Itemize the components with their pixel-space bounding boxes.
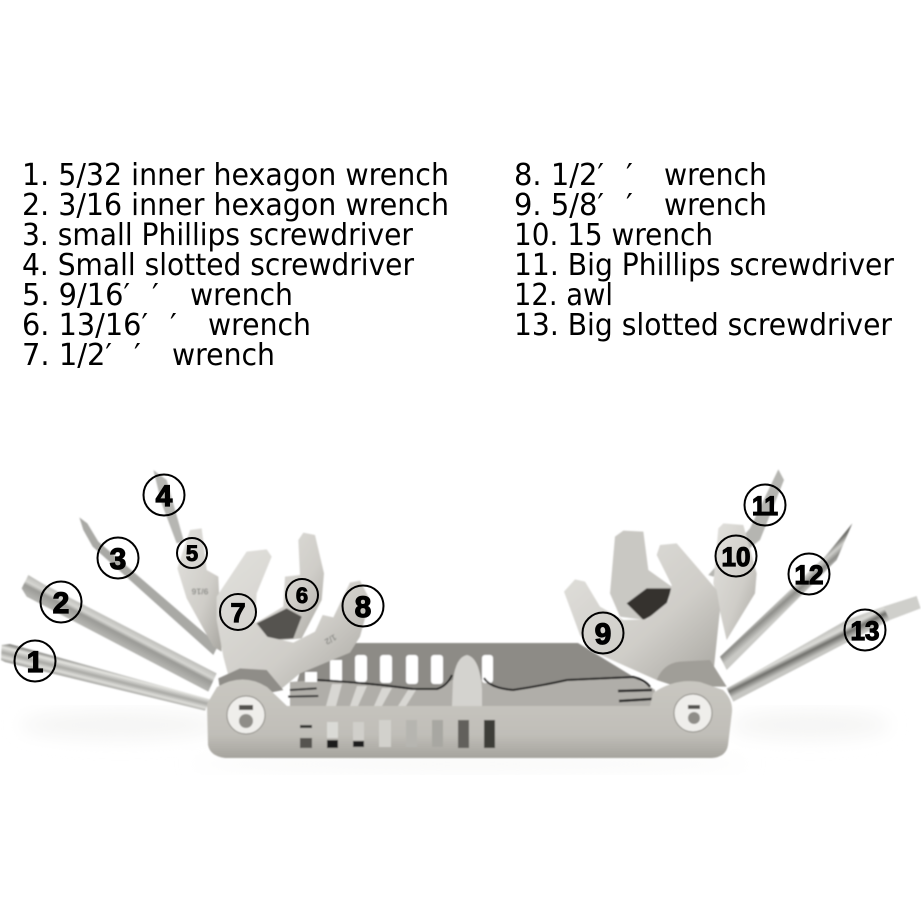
- front plate slots: [300, 720, 495, 748]
- wrench 9: [564, 543, 720, 680]
- callout 4: [144, 474, 184, 516]
- spring line: [317, 675, 650, 690]
- wrench 10: [713, 523, 757, 640]
- callout 9: [582, 612, 624, 654]
- left screw: [227, 696, 265, 734]
- floor shadow: [20, 711, 890, 769]
- callout 10: [716, 536, 756, 576]
- back plate: [290, 643, 655, 708]
- item 7: 7. 1/2′: [22, 338, 112, 373]
- wrench 6: [255, 533, 324, 642]
- callout 13: 13: [850, 616, 880, 646]
- callout 11: 11: [752, 491, 778, 521]
- item 5: ′: [152, 278, 159, 313]
- centre pin: [452, 655, 482, 706]
- item 9: ′: [626, 188, 633, 223]
- item 6: [22, 308, 311, 343]
- back plate lower strip: [290, 677, 655, 708]
- callout 13: [844, 610, 886, 650]
- item 6: ′: [170, 308, 177, 343]
- callout 3: [98, 538, 138, 578]
- reflected light stripes: [326, 684, 416, 706]
- callout 12: [788, 554, 830, 594]
- callout 9: 9: [595, 618, 611, 651]
- item 5: 5. 9/16′: [22, 278, 130, 313]
- item 6: wrench: [208, 308, 311, 343]
- item 7: ′: [134, 338, 141, 373]
- item 2: 2. 3/16 inner hexagon wrench: [22, 188, 449, 223]
- wrench 6 inner shadow: [257, 608, 302, 640]
- callout 10: 10: [722, 542, 750, 572]
- engraving on wrench 5: 9/16: [191, 587, 208, 597]
- back plate upper wall: [290, 643, 655, 708]
- wrench 7 and 8: [217, 549, 370, 690]
- item 1: 1. 5/32 inner hexagon wrench: [22, 158, 449, 193]
- text list: tools 1 to 7: [22, 158, 449, 373]
- item 10: 10. 15 wrench: [514, 218, 713, 253]
- item 9: wrench: [664, 188, 767, 223]
- back plate slots: [305, 655, 493, 684]
- item 4: 4. Small slotted screwdriver: [22, 248, 415, 283]
- left side tools: [1, 470, 370, 711]
- right side tools: [564, 469, 921, 702]
- pivot left: [218, 668, 283, 693]
- callout 7: 7: [230, 598, 246, 628]
- item 3: 3. small Phillips screwdriver: [22, 218, 414, 253]
- item 8: wrench: [664, 158, 767, 193]
- item 5: wrench: [190, 278, 293, 313]
- item 12: 12. awl: [514, 278, 613, 313]
- callout 2: [40, 582, 82, 622]
- callout 6: [286, 579, 318, 611]
- callout 5: [177, 538, 207, 568]
- spacer lines left: [288, 688, 318, 697]
- multi-tool illustration: [1, 469, 921, 758]
- callout 4: 4: [156, 480, 173, 513]
- callout 11: [744, 484, 786, 526]
- tool 3 Phillips screwdriver: [79, 517, 218, 655]
- item 7: [22, 338, 275, 373]
- item 8: 8. 1/2′: [514, 158, 604, 193]
- wrench 9 back prong: [610, 531, 672, 620]
- right screw: [674, 694, 712, 732]
- item 5: [22, 278, 293, 313]
- wrench 9 dark shading: [627, 588, 672, 620]
- number callouts: [14, 474, 886, 682]
- front plate: [207, 680, 732, 758]
- tool 13 shaft: [727, 607, 890, 702]
- callout 1: 1: [27, 646, 43, 679]
- callout 8: 8: [355, 591, 371, 624]
- tool 12 awl: [720, 523, 852, 670]
- tool 1 hex wrench: [1, 644, 211, 711]
- callout 5: 5: [186, 541, 198, 566]
- tool 13 blade: [883, 596, 921, 620]
- engraving on wrench 8: 1/2: [323, 632, 338, 647]
- item 9: [514, 188, 767, 223]
- item 8: ′: [626, 158, 633, 193]
- callout 1: [14, 640, 56, 682]
- item 9: 9. 5/8′: [514, 188, 604, 223]
- pivot right: [657, 660, 727, 687]
- callout 6: 6: [296, 583, 308, 608]
- spacer lines right: [618, 690, 652, 701]
- callout 12: 12: [794, 560, 824, 590]
- callout 3: 3: [110, 543, 126, 576]
- item 13: 13. Big slotted screwdriver: [514, 308, 893, 343]
- item 6: 6. 13/16′: [22, 308, 148, 343]
- item 11: 11. Big Phillips screwdriver: [514, 248, 895, 283]
- callout 7: [220, 594, 256, 630]
- wrench 5: [177, 528, 222, 652]
- callout 2: 2: [53, 587, 69, 620]
- tool 2 hex wrench: [22, 575, 217, 692]
- item 8: [514, 158, 767, 193]
- tool 4 slotted screwdriver: [153, 470, 184, 543]
- item 7: wrench: [172, 338, 275, 373]
- tool 11 Phillips screwdriver: [708, 469, 784, 577]
- text list: tools 8 to 13: [514, 158, 895, 343]
- callout 8: [342, 586, 384, 626]
